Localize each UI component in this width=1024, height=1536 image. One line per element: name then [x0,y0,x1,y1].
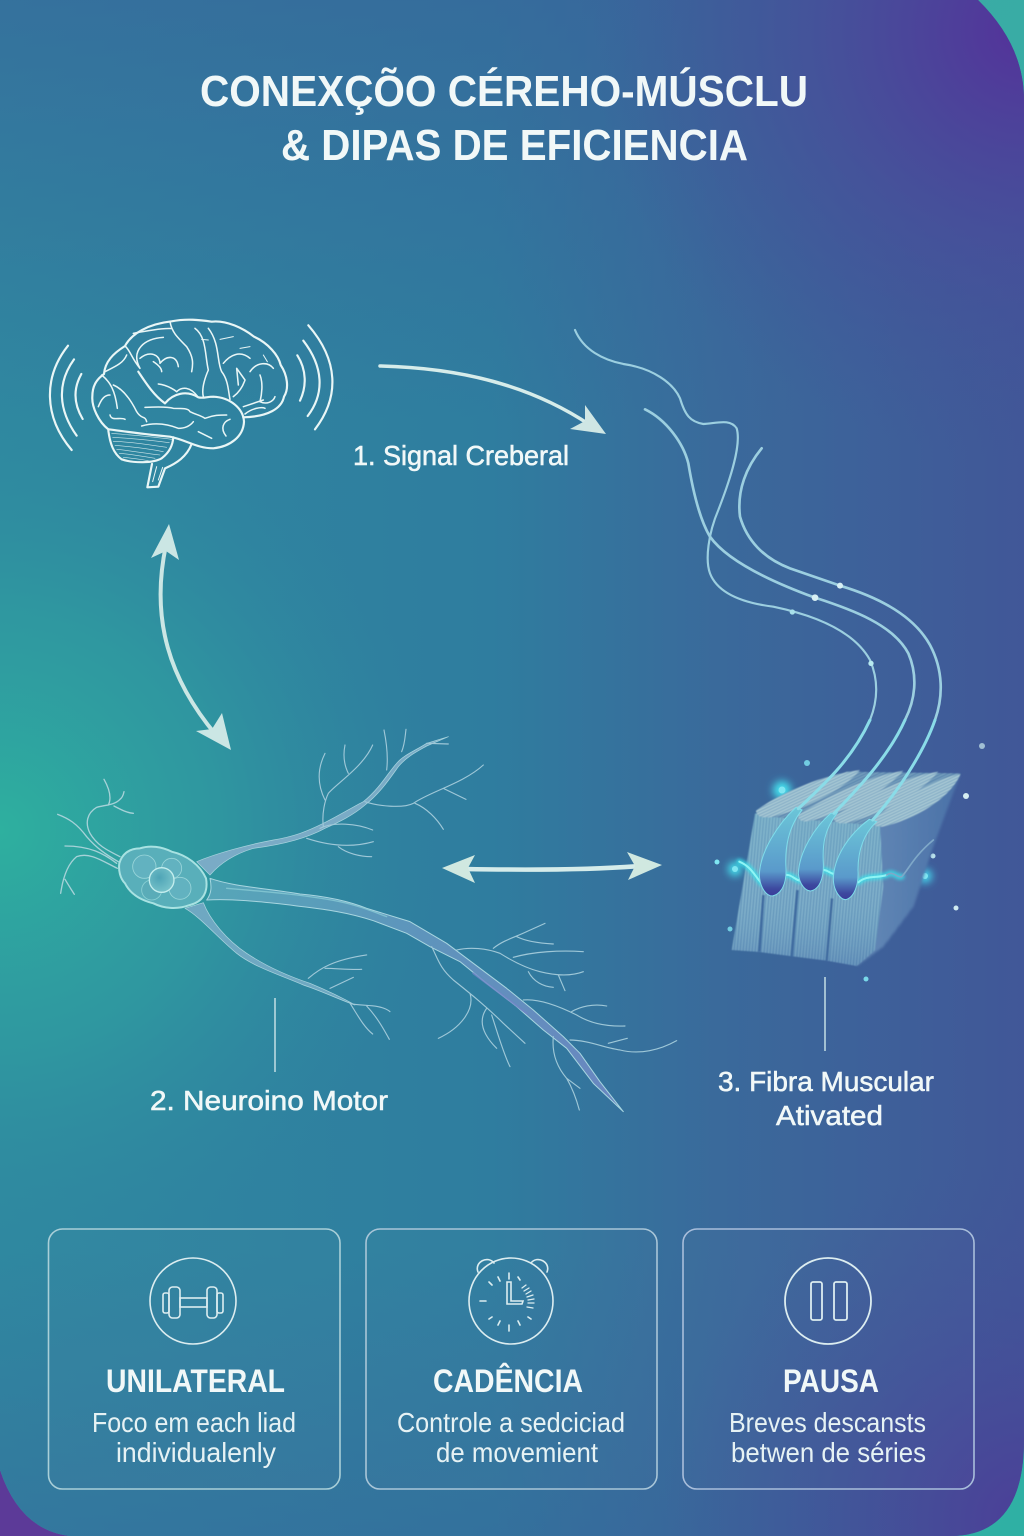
heading: CADÊNCIA [433,1363,583,1399]
label: signal: 1. Signal Creberal [353,440,569,471]
neuron cell body [119,847,207,908]
muscle side face [857,775,960,966]
icon: clock [469,1258,553,1344]
title: & DIPAS DE EFICIENCIA [281,121,748,170]
description [92,1407,296,1468]
description: individualenly [116,1437,276,1468]
muscle glow line [739,840,933,883]
muscle front face [732,813,883,966]
description: Controle a sedciciad [397,1407,625,1438]
title [200,66,808,170]
pointer: muscle [824,977,826,1051]
description: Breves descansts [729,1407,926,1438]
label: neuron: 2. Neuroino Motor [150,1085,388,1116]
description [397,1407,625,1468]
muscle fibre ends [798,720,935,820]
nerve fibers [575,330,941,720]
panel: cadencia [366,1229,657,1489]
arrow: brain to fibers [380,366,606,434]
brain outline [92,320,287,487]
heading: PAUSA [783,1363,879,1399]
label: muscle [718,1066,934,1131]
signal waves left [50,346,83,450]
muscle nerve drops [759,807,877,900]
icon: pause [785,1258,871,1344]
label: muscle: 3. Fibra Muscular [718,1066,934,1097]
description: de movemient [436,1437,598,1468]
panel: unilateral [48,1229,340,1489]
pointer: neuron [274,998,276,1072]
description [729,1407,926,1468]
signal waves right [297,325,332,429]
brain folds [98,322,275,438]
neuron axon branches [432,923,677,1110]
description: Foco em each liad [92,1407,296,1438]
icon: dumbbell [150,1258,236,1344]
arrow: brain to neuron [151,524,231,750]
arrow: neuron to muscle [442,852,662,883]
heading: UNILATERAL [106,1363,285,1399]
panel: pausa [683,1229,974,1489]
icon: motor neuron [58,729,677,1112]
icon: brain with signal waves [50,320,332,487]
title: CONEXÇÕO CÉREHO-MÚSCLU [200,66,808,116]
neuron left dendrites [58,779,133,894]
neuron upper dendrite [197,729,483,875]
neuron axon [207,878,623,1112]
neuron lower dendrite [185,903,390,1039]
cerebellum lines [112,433,172,461]
icon: muscle fibre block [714,720,985,982]
muscle sparks [714,743,985,982]
muscle top bundles [756,770,961,827]
label: muscle: Ativated [776,1100,883,1131]
description: betwen de séries [731,1437,926,1468]
